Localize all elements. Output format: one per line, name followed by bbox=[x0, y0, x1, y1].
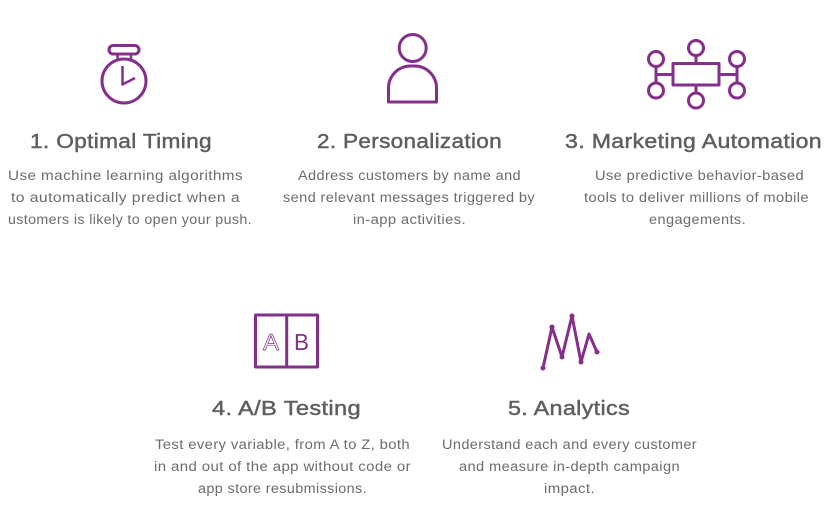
text block: a/b testing description: app store resubmissions. bbox=[198, 481, 367, 496]
icon: connected nodes bbox=[648, 40, 744, 108]
heading: analytics: 5. Analytics bbox=[508, 397, 630, 420]
text block: marketing automation description bbox=[584, 168, 809, 227]
text block: a/b testing description: in and out of the app without code or bbox=[154, 459, 411, 474]
panel: a/b testing bbox=[154, 315, 411, 496]
text block: personalization description: in-app activities. bbox=[353, 212, 466, 227]
text block: personalization description: send relevant messages triggered by bbox=[283, 190, 535, 205]
text block: optimal timing description: Use machine learning algorithms bbox=[8, 168, 243, 183]
text block: analytics description: Understand each and every customer bbox=[442, 437, 697, 452]
text block: analytics description: impact. bbox=[544, 481, 595, 496]
text block: marketing automation description: Use predictive behavior-based bbox=[595, 168, 804, 183]
text block: marketing automation description: engagements. bbox=[649, 212, 746, 227]
text block: a/b testing description: Test every variable, from A to Z, both bbox=[155, 437, 410, 452]
text block: optimal timing description: to automatically predict when a bbox=[11, 190, 240, 205]
text block: analytics description bbox=[442, 437, 697, 496]
panel: analytics bbox=[442, 314, 697, 496]
heading: marketing automation: 3. Marketing Automation bbox=[565, 130, 822, 153]
icon: a/b split: B bbox=[294, 329, 309, 355]
icon: person bbox=[388, 34, 436, 102]
text block: personalization description bbox=[283, 168, 535, 227]
icon: a/b split bbox=[256, 315, 318, 367]
heading: optimal timing: 1. Optimal Timing bbox=[30, 130, 212, 153]
icon: stopwatch bbox=[102, 46, 146, 103]
panel: personalization bbox=[283, 34, 535, 227]
text block: analytics description: and measure in-depth campaign bbox=[459, 459, 680, 474]
heading: a/b testing: 4. A/B Testing bbox=[212, 397, 361, 420]
text block: personalization description: Address customers by name and bbox=[298, 168, 521, 183]
heading: personalization: 2. Personalization bbox=[317, 130, 502, 153]
text block: marketing automation description: tools to deliver millions of mobile bbox=[584, 190, 809, 205]
text block: optimal timing description: ustomers is likely to open your push. bbox=[8, 212, 252, 227]
icon: a/b split: A bbox=[263, 329, 280, 355]
panel: optimal timing bbox=[8, 46, 252, 227]
text block: optimal timing description bbox=[8, 168, 252, 227]
text block: a/b testing description bbox=[154, 437, 411, 496]
panel: marketing automation bbox=[565, 40, 822, 227]
icon: line chart bbox=[540, 314, 600, 370]
